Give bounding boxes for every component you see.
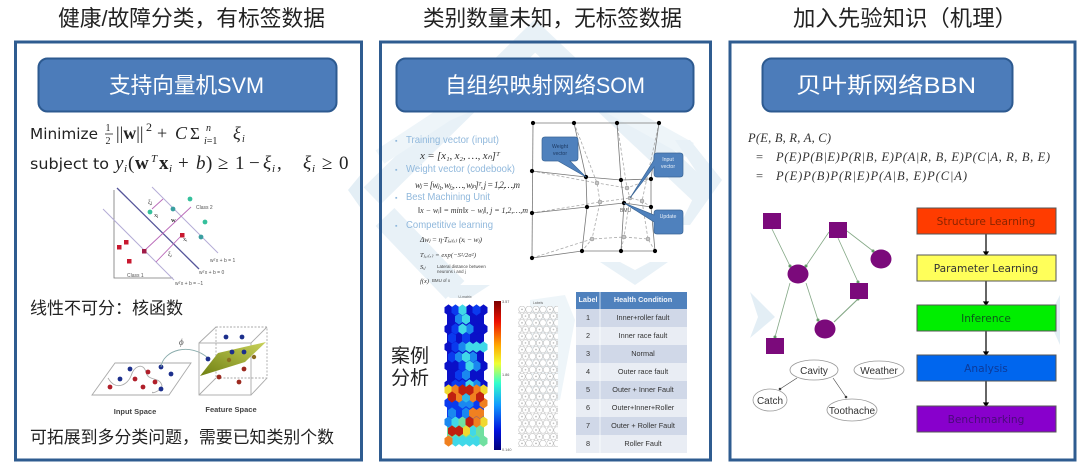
text: case study label: [391, 345, 429, 389]
table: health conditions: Roller Fault: [624, 439, 662, 448]
table: health conditions: 6: [586, 403, 590, 412]
chart: SVM margin diagram: wᵀx + b = −1: [175, 281, 203, 287]
chart: SVM margin diagram: Class 2: [196, 205, 213, 211]
heading: SVM: [38, 58, 336, 112]
table: health conditions: Health Condition: [614, 295, 672, 304]
text block: SOM definitions: ▪: [395, 167, 398, 174]
formula: SVM objective: i=1: [204, 136, 217, 147]
formula: SVM objective: x: [159, 153, 169, 174]
step: structure learning: Structure Learning: [937, 216, 1035, 228]
chart: SVM margin diagram: wᵀx + b = 0: [199, 270, 224, 276]
text block: SOM definitions: wⱼ = [wⱼ₁, wⱼ₂, …, wⱼₙ]ᵀ, j = 1,2,…,m: [415, 180, 520, 190]
formula: SVM objective: +: [157, 123, 167, 143]
table: health conditions: Outer + Inner Fault: [612, 385, 674, 394]
table: health conditions: 8: [586, 439, 590, 448]
title: SVM column: 健康/故障分类，有标签数据: [58, 6, 325, 31]
formula: SVM objective: C: [175, 123, 188, 143]
text block: SOM definitions: BMU of x: [432, 278, 451, 283]
diagram: cavity example network: [753, 360, 904, 421]
formula: joint probability factorisation: P(E, B, R, A, C): [747, 131, 831, 145]
text: kernel function note: 线性不可分：核函数: [30, 299, 183, 318]
formula: SVM objective: ≥: [322, 153, 332, 174]
callout: weight vector: [542, 137, 586, 177]
formula: SVM objective: ξ: [303, 153, 312, 174]
text: case study label: 案例: [391, 345, 429, 367]
panel: SOM: [380, 42, 710, 460]
callout: input vector: Input: [662, 157, 674, 163]
diagram: cavity example network: Toothache: [829, 406, 876, 417]
formula: SVM objective: ,: [277, 153, 282, 174]
formula: SVM objective: subject to: [30, 155, 109, 173]
chart: SVM margin diagram: wᵀx + b = 1: [210, 258, 235, 264]
chart: SVM margin diagram: [103, 187, 235, 287]
chart: SVM margin diagram: w: [171, 217, 176, 224]
formula: SVM objective: +: [178, 153, 189, 174]
formula: SVM objective: n: [206, 123, 211, 134]
chart: label hex map: [518, 301, 558, 447]
table: health conditions: [576, 292, 687, 453]
chart: U-matrix hex map: [444, 295, 488, 447]
callout: input vector: vector: [661, 164, 675, 170]
step: benchmarking: Benchmarking: [948, 414, 1024, 426]
text block: SOM definitions: Weight vector (codebook): [406, 163, 515, 175]
chart: colour bar: [494, 300, 512, 452]
formula: SVM objective: 1: [106, 123, 110, 134]
formula: SVM objective: Σ: [190, 124, 200, 143]
step: parameter learning: [917, 255, 1056, 281]
text block: SOM definitions: Competitive learning: [406, 219, 493, 231]
heading: BBN: 贝叶斯网络BBN: [796, 73, 976, 98]
table: health conditions: 3: [586, 349, 590, 358]
formula: SVM objective: [30, 120, 348, 175]
diagram: cavity example network: Catch: [757, 396, 783, 407]
text block: SOM definitions: [395, 134, 528, 285]
step: parameter learning: Parameter Learning: [934, 263, 1038, 275]
formula: SVM objective: b: [196, 153, 206, 174]
chart: label hex map: Labels: [533, 301, 543, 305]
table: health conditions: 7: [586, 421, 590, 430]
text block: SOM definitions: ‖x − wᵢ‖ = min‖x − wⱼ‖, j = 1,2,…,m: [418, 206, 528, 215]
table: health conditions: Outer race fault: [618, 367, 668, 376]
heading: SOM: [396, 58, 694, 112]
chart: SVM margin diagram: xⱼ: [154, 212, 158, 219]
diagram: cavity example network: Weather: [860, 366, 898, 377]
callout: weight vector: Weight: [552, 144, 569, 150]
table: health conditions: 2: [586, 331, 590, 340]
table: health conditions: Outer+Inner+Roller: [612, 403, 675, 412]
table: health conditions: 1: [586, 313, 590, 322]
heading: SVM: 支持向量机SVM: [109, 73, 264, 98]
formula: SVM objective: ξ: [263, 153, 272, 174]
diagram: SOM lattice: BMU: [620, 208, 632, 214]
text block: SOM definitions: Training vector (input): [406, 134, 499, 146]
table: health conditions: Normal: [631, 349, 655, 358]
chart: colour bar: 3.57: [502, 300, 509, 304]
formula: SVM objective: Minimize: [30, 125, 98, 143]
panel: SVM: [16, 42, 362, 460]
formula: SVM objective: 2: [106, 136, 110, 147]
text block: SOM definitions: ▪: [395, 195, 398, 202]
formula: SVM objective: ||w||: [116, 123, 143, 143]
text: multi-class note: 可拓展到多分类问题，需要已知类别个数: [30, 428, 334, 447]
chart: SVM margin diagram: ξⱼ: [148, 199, 152, 206]
text block: SOM definitions: ▪: [395, 138, 398, 145]
formula: SVM objective: (: [128, 153, 134, 174]
flowchart: BBN workflow: [917, 208, 1056, 432]
formula: SVM objective: 2: [146, 120, 152, 134]
formula: SVM objective: 1: [235, 153, 244, 174]
step: benchmarking: [917, 406, 1056, 432]
chart: U-matrix hex map: U-matrix: [458, 295, 472, 299]
formula: SVM objective: ξ: [233, 123, 241, 143]
chart: colour bar: 1.86: [502, 373, 509, 377]
diagram: purple Bayesian network: [763, 213, 892, 354]
step: inference: [917, 305, 1056, 331]
step: structure learning: [917, 208, 1056, 234]
formula: SVM objective: 0: [339, 153, 348, 174]
formula: SVM objective: T: [151, 153, 158, 165]
text block: SOM definitions: x = [x₁, x₂, …, xₙ]ᵀ: [419, 150, 501, 162]
callout: update: Update: [660, 214, 676, 220]
panel: BBN: [730, 42, 1075, 460]
heading: SOM: 自组织映射网络SOM: [445, 73, 645, 98]
formula: SVM objective: i: [242, 134, 245, 145]
chart: colour bar: 0.140: [502, 448, 512, 452]
table: health conditions: Label: [578, 295, 598, 304]
formula: joint probability factorisation: =: [756, 150, 763, 164]
diagram: input space to feature space: Feature Space: [205, 405, 257, 414]
background watermark: [348, 36, 1060, 400]
step: inference: Inference: [961, 313, 1011, 325]
title: BBN column: 加入先验知识（机理）: [793, 6, 1017, 31]
formula: joint probability factorisation: =: [756, 169, 763, 183]
chart: SVM margin diagram: xᵢ: [183, 236, 188, 243]
diagram: cavity example network: Cavity: [800, 366, 828, 377]
text block: SOM definitions: neurons i and j: [437, 269, 466, 274]
formula: joint probability factorisation: P(E)P(B|E)P(R|B, E)P(A|R, B, E)P(C|A, R, B, E): [775, 150, 1050, 164]
formula: SVM objective: w: [135, 153, 149, 174]
formula: SVM objective: y: [113, 153, 124, 174]
text block: SOM definitions: ▪: [395, 223, 398, 230]
step: analysis: Analysis: [964, 363, 1008, 375]
formula: SVM objective: i: [124, 163, 127, 175]
callout: update: [624, 203, 683, 234]
title: SOM column: 类别数量未知，无标签数据: [423, 6, 682, 31]
heading: BBN: [762, 58, 1012, 112]
text block: SOM definitions: Δwⱼ = η·Tⱼ,ᵢ₍ₓ₎ (xᵢ − wⱼ): [419, 235, 482, 244]
text block: SOM definitions: Tⱼ,ᵢ₍ₓ₎ = exp(−S²/2σ²): [420, 252, 476, 259]
diagram: input space to feature space: Input Space: [114, 407, 156, 416]
formula: SVM objective: i: [312, 163, 315, 175]
formula: joint probability factorisation: [747, 131, 1050, 183]
step: analysis: [917, 355, 1056, 381]
table: health conditions: Inner race fault: [619, 331, 667, 340]
formula: SVM objective: ≥: [218, 153, 228, 174]
diagram: input space to feature space: [92, 327, 267, 416]
formula: SVM objective: ): [206, 153, 212, 174]
table: health conditions: 4: [586, 367, 590, 376]
formula: SVM objective: i: [272, 163, 275, 175]
callout: weight vector: vector: [553, 151, 567, 157]
text block: SOM definitions: Lateral distance between: [437, 264, 486, 269]
diagram: input space to feature space: ϕ: [179, 337, 184, 347]
formula: SVM objective: i: [169, 163, 172, 175]
table: health conditions: Inner+roller fault: [617, 313, 669, 322]
chart: SVM margin diagram: ξᵢ: [168, 251, 173, 258]
text block: SOM definitions: Best Machining Unit: [406, 191, 490, 203]
formula: SVM objective: −: [249, 153, 260, 174]
table: health conditions: 5: [586, 385, 590, 394]
formula: joint probability factorisation: P(E)P(B)P(R|E)P(A|B, E)P(C|A): [775, 169, 967, 183]
text block: SOM definitions: Sᵢⱼ: [420, 264, 426, 271]
callout: input vector: [630, 153, 683, 198]
chart: SVM margin diagram: Class 1: [127, 273, 144, 279]
text block: SOM definitions: f(x): [420, 278, 429, 285]
text: case study label: 分析: [391, 367, 429, 389]
table: health conditions: Outer + Roller Fault: [611, 421, 675, 430]
diagram: SOM lattice: [530, 121, 683, 260]
